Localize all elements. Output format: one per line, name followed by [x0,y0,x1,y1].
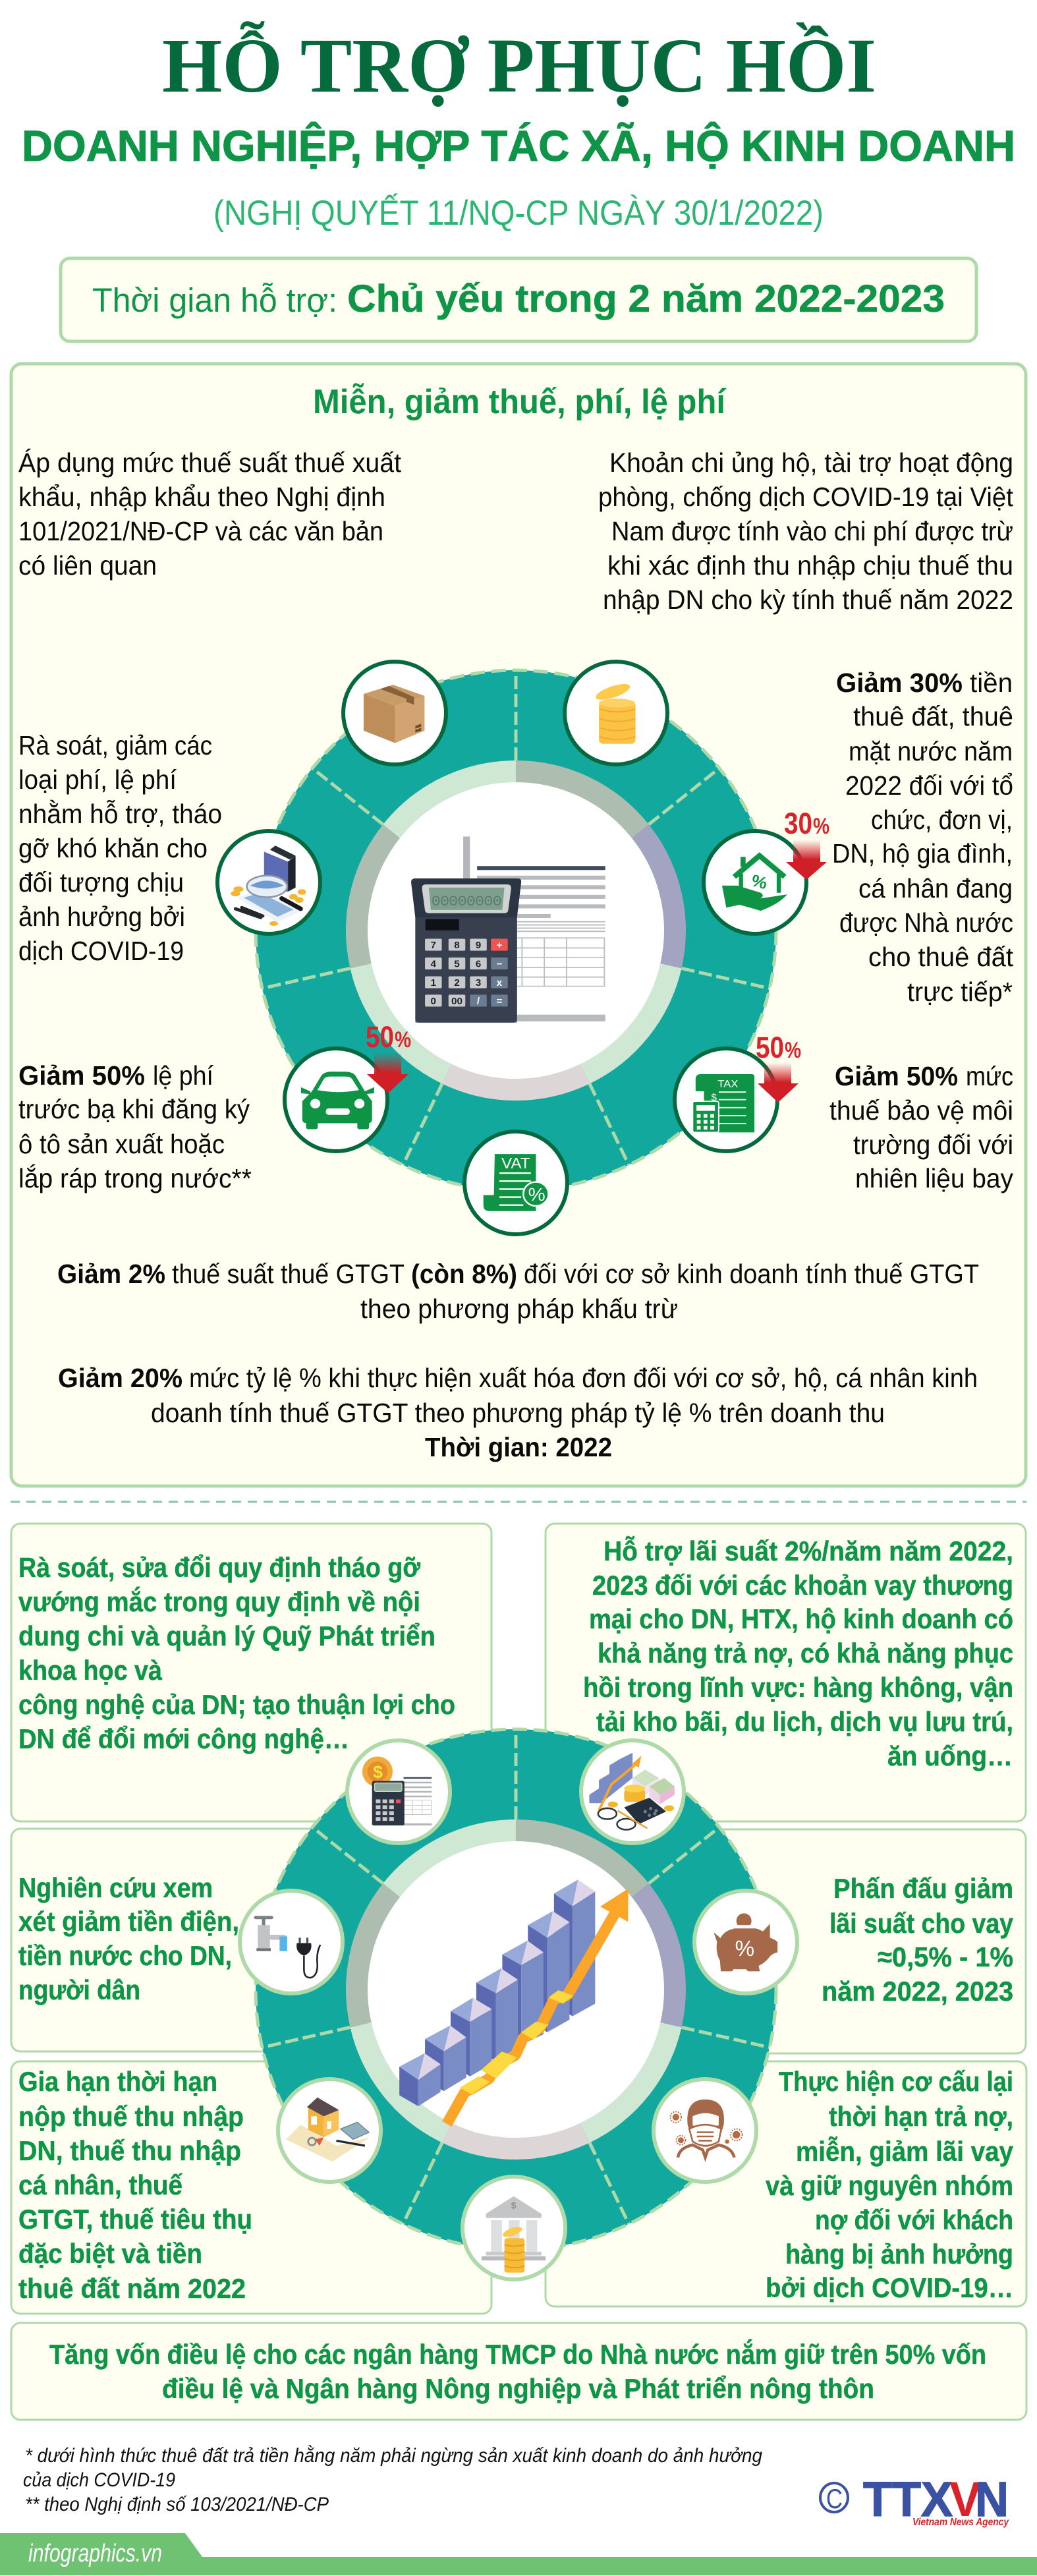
text: debt restructuring: bởi dịch COVID-19… [766,2272,1013,2303]
text: export import tax: khẩu, nhập khẩu theo Nghị định [18,482,385,512]
footnotes: của dịch COVID-19 [23,2469,175,2491]
panel: lending rates [546,1829,1026,2053]
text: lending rates: năm 2022, 2023 [822,1976,1013,2007]
text: COVID donations: Nam được tính vào chi phí được trừ [611,516,1013,546]
footnotes: ** theo Nghị định số 103/2021/NĐ-CP [25,2494,329,2515]
text: 50 percent registration fee: Giảm 50% [18,1060,145,1091]
text: 30 percent land rent: Giảm 30% [836,668,963,698]
icon: calculator and document: / [477,996,480,1007]
icon: tap and plug [240,1891,343,1993]
text: debt restructuring: hàng bị ảnh hưởng [785,2239,1013,2270]
text: review of fees: Rà soát, giảm các [18,730,212,760]
arrow: minus 50 percent car: % [395,1027,411,1052]
title: HỖ TRỢ PHỤC HỒI [162,20,876,109]
text: tax deferral: GTGT, thuế tiêu thụ [18,2204,252,2235]
text: 30 percent land rent: trực tiếp* [907,977,1013,1007]
text: science fund: DN để đổi mới công nghệ… [18,1723,349,1754]
text: interest support: ăn uống… [887,1740,1013,1771]
icon: house in hand: % [749,871,770,893]
text: 30 percent land rent: chức, đơn vị, [871,805,1013,835]
arrow: minus 30 percent [784,807,829,880]
arrow: growth [447,1889,629,2124]
arrow: minus 30 percent: 30 [784,807,812,840]
icon: calculator and document: 7 [431,940,436,951]
footer bar [0,2533,1037,2575]
icon: bank and coins [462,2177,565,2279]
text: 20 percent invoices: Giảm 20% [58,1363,182,1393]
text: review of fees [18,730,222,966]
text: COVID donations [598,447,1014,615]
panel: bank capital: điều lệ và Ngân hàng Nông nghiệp và Phát triển nông thôn [162,2373,874,2404]
text: debt restructuring: và giữ nguyên nhóm [766,2170,1013,2201]
icon: calculator and document: 6 [476,959,481,969]
panel: support period: Chủ yếu trong 2 năm 2022-2023 [347,277,945,320]
chart wheel: tax measures [256,670,776,1191]
text: debt restructuring: nợ đối với khách [815,2204,1013,2235]
text: 50 percent registration fee: ô tô sản xuất hoặc [18,1129,225,1159]
text: review of fees: gỡ khó khăn cho [18,833,208,863]
icon: tax document [675,1048,777,1151]
arrow: minus 50 percent fuel: % [785,1038,801,1063]
arrow: minus 50 percent fuel [756,1031,801,1102]
icon: calculator and document: 4 [431,959,437,969]
text: lending rates: ≈0,5% - 1% [878,1941,1013,1972]
text: 30 percent land rent: mặt nước năm [849,736,1013,766]
icon: coins [565,662,667,764]
text: export import tax: Áp dụng mức thuế suất thuế xuất [18,447,402,478]
arrow: minus 50 percent car: 50 [366,1020,394,1054]
text: tax deferral: DN, thuế thu nhập [18,2135,241,2166]
resolution reference: (NGHỊ QUYẾT 11/NQ-CP NGÀY 30/1/2022) [213,193,824,233]
text: debt restructuring: thời hạn trả nợ, [829,2101,1013,2132]
text: tax deferral: đặc biệt và tiền [18,2238,202,2269]
icon: calculator and document [411,836,605,1023]
text: review of fees: loại phí, lệ phí [18,764,177,795]
text: science fund: dung chi và quản lý Quỹ Phát triển [18,1620,435,1651]
icon: calculator and coin: $ [373,1762,383,1782]
chart wheel: recovery measures [256,1729,776,2250]
text: VAT 2 percent: đối với cơ sở kinh doanh tính thuế GTGT [524,1259,979,1289]
panel heading: Miễn, giảm thuế, phí, lệ phí [313,383,726,421]
footer bar: infographics.vn [28,2540,162,2567]
text: 20 percent invoices: Thời gian: 2022 [425,1432,612,1462]
logo: TTXVN: TTX [863,2472,953,2527]
panel: debt restructuring [546,2061,1026,2306]
text: review of fees: ảnh hưởng bởi [18,902,185,932]
panel: tax deferral [11,2061,491,2314]
text: 30 percent land rent: DN, hộ gia đình, [832,838,1013,869]
icon: calculator and document: 1 [431,977,436,988]
icon: calculator and document: 0 [431,996,436,1007]
icon: calculator and document: 3 [476,977,481,988]
icon: VAT document [464,1131,567,1234]
text: 50 percent fuel tax: trường đối với [853,1130,1013,1160]
icon: calculator and document: − [496,959,503,969]
arrow: minus 50 percent car [366,1020,411,1093]
text: export import tax [18,447,402,581]
text: lending rates: Phấn đấu giảm [833,1873,1013,1904]
text: science fund: khoa học và [18,1655,163,1686]
panel: support period [61,258,976,341]
text: debt restructuring: miễn, giảm lãi vay [796,2135,1014,2167]
text: lending rates [822,1873,1014,2007]
text: tax deferral: thuê đất năm 2022 [18,2273,246,2304]
icon: piggy bank: % [735,1937,754,1961]
text: 30 percent land rent: được Nhà nước [839,907,1013,938]
icon: house in hand [704,831,806,934]
text: electricity and water: Nghiên cứu xem [18,1872,213,1903]
text: VAT 2 percent: theo phương pháp khấu trừ [360,1294,678,1324]
icon: calculator and document: 5 [454,959,460,969]
icon: calculator and document: 8 [454,940,460,951]
text: 30 percent land rent: cá nhân đang [858,873,1013,903]
text: COVID donations: phòng, chống dịch COVID-19 tại Việt [598,482,1014,512]
logo: TTXVN [820,2472,1009,2528]
icon: cardboard box [343,662,446,764]
panel: tax and fee reductions [11,364,1026,1486]
text: 50 percent registration fee: lắp ráp trong nước** [18,1163,252,1193]
text: 30 percent land rent: tiền [970,668,1013,698]
icon: calculator and document: 00000000 [432,894,502,910]
text: tax deferral: Gia hạn thời hạn [18,2066,217,2097]
text: electricity and water: xét giảm tiền điện, [18,1906,239,1937]
text: 20 percent invoices: doanh tính thuế GTGT theo phương pháp tỷ lệ % trên doanh thu [151,1398,885,1428]
arrow: minus 50 percent fuel: 50 [756,1031,784,1064]
text: interest support [583,1535,1013,1771]
text: review of fees: nhằm hỗ trợ, tháo [18,799,222,829]
icon: calculator and document: 9 [476,940,481,951]
text: 50 percent registration fee: lệ phí [153,1060,214,1091]
icon: calculator and document: 2 [454,977,460,988]
text: COVID donations: khi xác định thu nhập chịu thuế thu [607,550,1013,581]
text: export import tax: 101/2021/NĐ-CP và các văn bản [18,516,383,546]
icon: calculator and document: 00 [451,996,462,1007]
icon: calculator and document: + [496,940,503,951]
text: 50 percent registration fee [18,1060,252,1193]
icon: person wearing mask [654,2079,756,2182]
text: electricity and water: tiền nước cho DN, [18,1940,232,1971]
icon: calculator and coin [347,1740,450,1843]
panel: support period: Thời gian hỗ trợ: [92,281,337,319]
text: 50 percent fuel tax [829,1061,1013,1193]
icon: car [285,1048,387,1151]
icon: VAT document: % [528,1185,546,1205]
text: tax deferral [18,2066,252,2304]
text: debt restructuring [766,2066,1014,2303]
text: science fund [18,1552,455,1754]
text: 20 percent invoices [58,1363,978,1462]
text: electricity and water [18,1872,239,2005]
logo: TTXVN: V [949,2472,981,2527]
logo: TTXVN: Vietnam News Agency [912,2517,1009,2528]
text: 30 percent land rent [832,668,1014,1007]
text: 50 percent fuel tax: Giảm 50% [835,1061,958,1091]
logo: TTXVN: N [975,2472,1009,2527]
text: tax deferral: nộp thuế thu nhập [18,2101,244,2132]
panel: interest support [546,1524,1026,1821]
text: VAT 2 percent: (còn 8%) [411,1259,517,1289]
text: 30 percent land rent: thuê đất, thuê [853,701,1013,731]
footnotes: * dưới hình thức thuê đất trả tiền hằng năm phải ngừng sản xuất kinh doanh do ảnh hưởng [25,2445,762,2467]
text: 30 percent land rent: cho thuê đất [868,942,1014,972]
icon: VAT document: VAT [501,1155,530,1172]
arrow: minus 30 percent: % [813,814,829,839]
panel: science fund [11,1524,491,1821]
text: 50 percent fuel tax: nhiên liệu bay [855,1163,1013,1193]
text: review of fees: dịch COVID-19 [18,936,184,966]
text: VAT 2 percent [57,1259,979,1324]
panel: bank capital [11,2323,1026,2420]
logo: TTXVN: C [826,2483,843,2514]
text: 50 percent fuel tax: mức [966,1061,1013,1091]
icon: tax document: TAX [717,1078,739,1090]
icon: tax document: $ [711,1092,717,1103]
text: review of fees: đối tượng chịu [18,867,184,898]
icon: calculator and document: = [496,996,503,1007]
chart: rising bars with arrow [399,1879,629,2124]
icon: binders and reports [217,831,320,934]
text: 50 percent registration fee: trước bạ khi đăng ký [18,1094,250,1124]
text: science fund: vướng mắc trong quy định về nội [18,1586,420,1617]
section divider [11,1501,1026,1503]
text: tax deferral: cá nhân, thuế [18,2169,183,2200]
footnotes [23,2445,762,2515]
text: electricity and water: người dân [18,1974,140,2005]
text: science fund: công nghệ của DN; tạo thuận lợi cho [18,1689,455,1720]
icon: bank and coins: $ [511,2200,517,2211]
text: science fund: Rà soát, sửa đổi quy định tháo gỡ [18,1552,420,1583]
text: interest support: Hỗ trợ lãi suất 2%/năm năm 2022, [603,1535,1013,1566]
text: VAT 2 percent: Giảm 2% [57,1259,165,1289]
text: COVID donations: Khoản chi ủng hộ, tài trợ hoạt động [609,447,1013,478]
text: 50 percent fuel tax: thuế bảo vệ môi [829,1095,1013,1126]
text: export import tax: có liên quan [18,550,157,581]
icon: money and calculator [581,1740,684,1843]
icon: house, keys and paperwork [278,2079,381,2182]
icon: calculator and document: x [497,977,503,988]
text: 30 percent land rent: 2022 đối với tổ [845,770,1013,801]
subtitle: DOANH NGHIỆP, HỢP TÁC XÃ, HỘ KINH DOANH [22,121,1015,170]
text: VAT 2 percent: thuế suất thuế GTGT [172,1259,405,1289]
icon: piggy bank [694,1891,797,1993]
text: COVID donations: nhập DN cho kỳ tính thuế năm 2022 [603,585,1013,615]
text: 20 percent invoices: mức tỷ lệ % khi thực hiện xuất hóa đơn đối với cơ sở, hộ, cá nhân kinh [189,1363,978,1393]
text: lending rates: lãi suất cho vay [829,1908,1014,1939]
panel: electricity and water [11,1829,491,2051]
